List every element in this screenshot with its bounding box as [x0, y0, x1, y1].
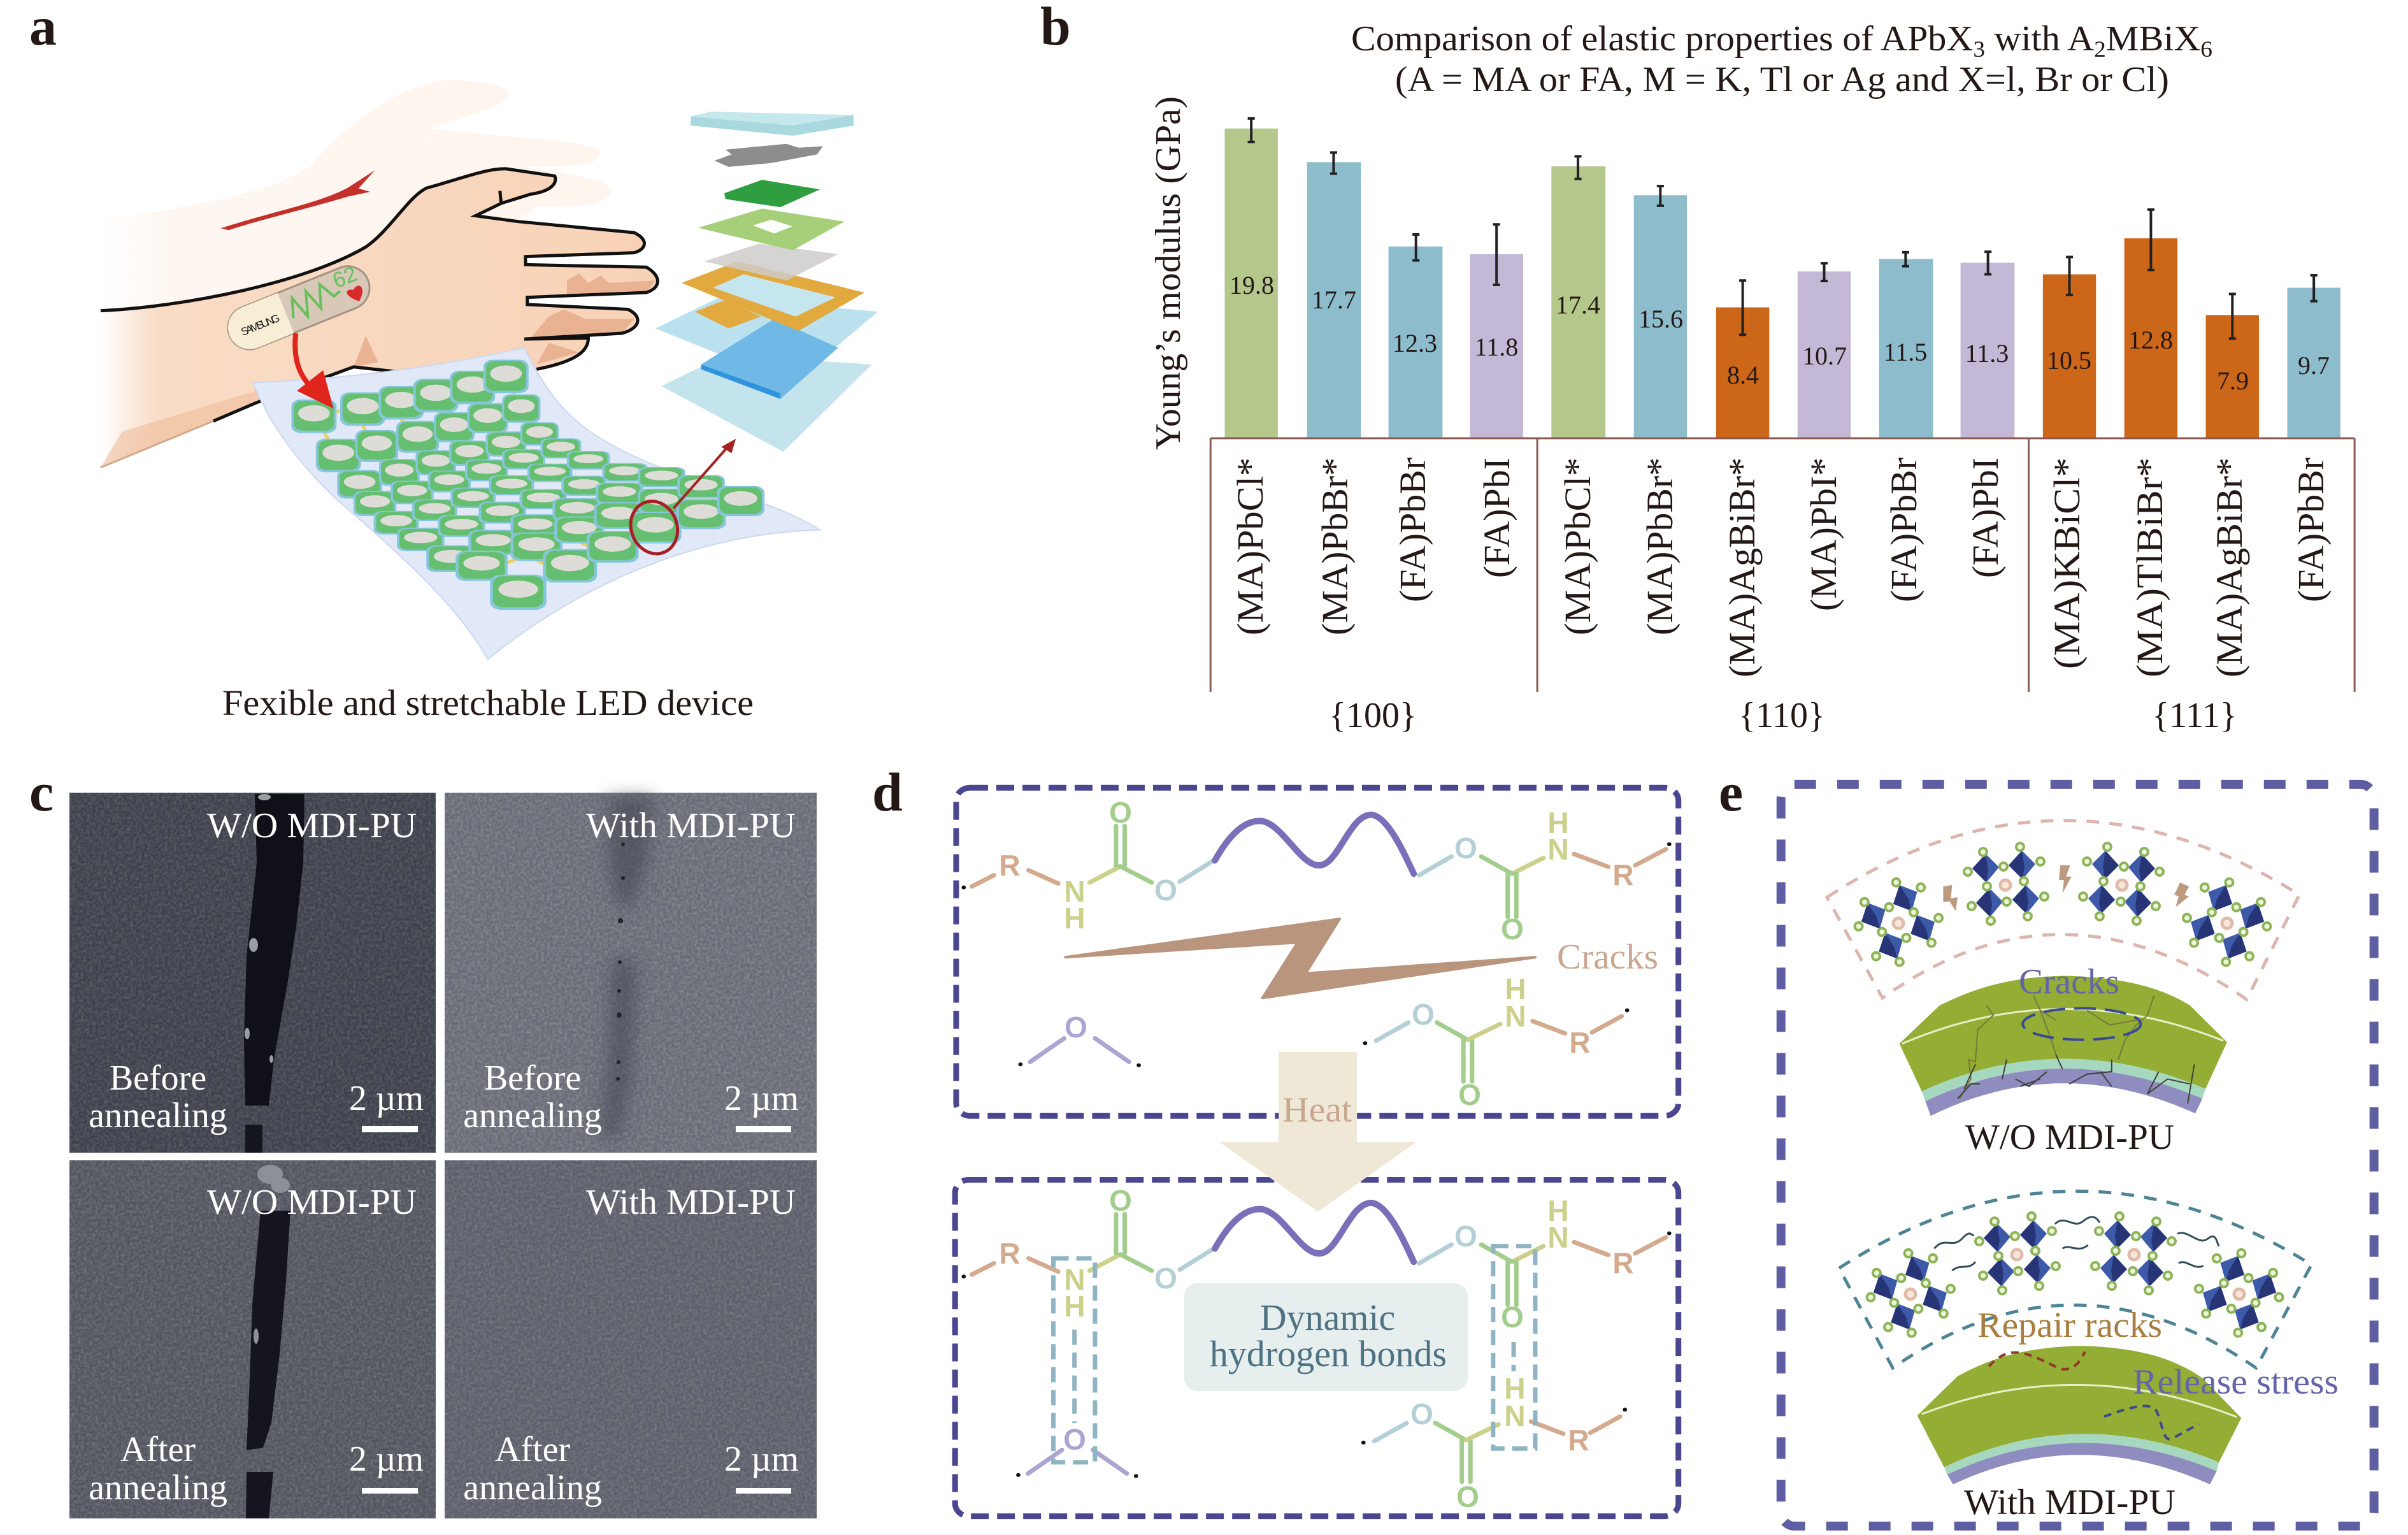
chart title: 6 — [2200, 36, 2212, 62]
dashed crack ellipse — [2023, 1008, 2140, 1040]
atom labels bottom: H — [1064, 1290, 1086, 1323]
category labels: (MA)PbI* — [1803, 458, 1844, 611]
repair crack trail — [1989, 1351, 2085, 1369]
panel label c: c — [29, 761, 54, 823]
illustration: sheet and layers — [253, 112, 878, 659]
category labels: (FA)PbI — [1476, 458, 1517, 578]
perovskite clusters: without MDI-PU — [1844, 843, 2282, 976]
category labels: (MA)AgBiBr* — [1721, 458, 1763, 677]
SEM image: With MDI-PU after annealing — [445, 1160, 817, 1518]
category labels: (MA)TlBiBr* — [2129, 458, 2170, 677]
bar values: 15.6 — [1638, 305, 1683, 333]
SEM image: With MDI-PU before annealing: With MDI-PU — [586, 806, 796, 846]
bar values: 10.7 — [1802, 342, 1847, 370]
crystal plane group labels: {111} — [2152, 696, 2237, 735]
SEM image: W/O MDI-PU after annealing: After — [120, 1430, 196, 1469]
icon: skin patch device — [221, 259, 376, 356]
SEM image: W/O MDI-PU after annealing: W/O MDI-PU — [207, 1183, 417, 1222]
bar values: 12.3 — [1393, 329, 1437, 357]
category labels: (MA)PbBr* — [1639, 458, 1681, 635]
chart title: Comparison of elastic properties of APbX — [1351, 19, 1951, 59]
perovskite clusters: with MDI-PU — [1856, 1213, 2294, 1347]
SEM image: With MDI-PU after annealing: 2 µm — [724, 1439, 799, 1479]
SEM image: W/O MDI-PU after annealing — [69, 1160, 436, 1518]
hydrogen bond highlight boxes — [1054, 1246, 1535, 1462]
bottom chain bonds — [972, 1203, 1666, 1482]
SEM image: W/O MDI-PU before annealing: 2 µm — [349, 1079, 424, 1118]
lightning crack — [1065, 919, 1535, 998]
top chain bonds — [972, 815, 1666, 1081]
chart title: 2 — [2094, 36, 2106, 62]
chart title: with A — [1985, 19, 2095, 59]
caption: W/O MDI-PU: W/O MDI-PU — [1965, 1118, 2174, 1157]
atom labels top: O — [1154, 874, 1177, 907]
category labels: (MA)PbCl* — [1557, 458, 1598, 635]
label: Repair racks: Repair racks — [1977, 1306, 2162, 1345]
dynamic hydrogen bonds callout box — [1184, 1283, 1468, 1391]
chart title: MBiX — [2106, 19, 2200, 59]
SEM image: With MDI-PU before annealing: Before — [484, 1058, 581, 1098]
atom labels top: O — [1454, 832, 1477, 865]
chart title — [1351, 19, 2212, 99]
category labels: (MA)AgBiBr* — [2209, 458, 2250, 677]
atom labels top: H — [1505, 972, 1526, 1005]
atom labels bottom: H — [1504, 1372, 1526, 1405]
heat arrow — [1219, 1052, 1416, 1212]
panel e: crack repair schematic — [1719, 761, 2374, 1526]
SEM image: W/O MDI-PU after annealing: annealing — [89, 1468, 227, 1508]
atom labels top: O — [1412, 998, 1435, 1031]
label: Release stress: Release stress — [2133, 1362, 2339, 1402]
atom labels top: O — [1064, 1011, 1087, 1044]
bars and error bars — [1210, 119, 2354, 692]
atom labels bottom: O — [1063, 1423, 1086, 1456]
atom labels bottom — [999, 1184, 1634, 1513]
bar values: 11.8 — [1475, 333, 1518, 361]
bar values: 10.5 — [2047, 346, 2091, 375]
SEM image: With MDI-PU after annealing: annealing — [463, 1468, 602, 1508]
film stack: with MDI-PU — [1917, 1346, 2241, 1485]
SEM image: W/O MDI-PU before annealing: annealing — [89, 1096, 227, 1135]
atom labels bottom: N — [1504, 1399, 1526, 1432]
caption a: Fexible and stretchable LED device — [222, 683, 754, 723]
atom labels top: O — [1501, 912, 1524, 946]
dashed box: healed state — [955, 1179, 1679, 1517]
atom labels top: N — [1547, 833, 1569, 866]
SEM image: With MDI-PU before annealing — [445, 793, 817, 1153]
SEM image: W/O MDI-PU before annealing: Before — [110, 1058, 206, 1098]
category labels: (MA)KBiCl* — [2046, 458, 2088, 669]
dashed wedge: without MDI-PU — [1827, 821, 2299, 1000]
film stack: without MDI-PU — [1900, 976, 2227, 1116]
LED connector grid — [314, 377, 741, 590]
label: Cracks: Cracks — [2019, 962, 2119, 1002]
panel label d: d — [872, 761, 903, 823]
dashed outer frame — [1781, 784, 2374, 1526]
patch brand: SAMSUNG — [240, 312, 282, 338]
SEM image: W/O MDI-PU after annealing: 2 µm — [349, 1439, 424, 1479]
chart title: (A = MA or FA, M = K, Tl or Ag and X=l, Br or Cl) — [1395, 60, 2169, 99]
SEM image: With MDI-PU after annealing: With MDI-PU — [586, 1183, 796, 1222]
atom labels top: N — [1505, 1000, 1526, 1033]
SEM image: W/O MDI-PU before annealing: W/O MDI-PU — [207, 806, 417, 846]
bar values: 17.4 — [1556, 291, 1600, 319]
atom labels bottom: H — [1547, 1194, 1569, 1227]
patch readout 62: 62 — [329, 262, 361, 293]
SEM image: With MDI-PU before annealing: annealing — [463, 1096, 602, 1135]
atom labels bottom: N — [1064, 1263, 1086, 1296]
dashed box: cracked state — [956, 788, 1679, 1116]
bar values: 11.5 — [1884, 338, 1927, 366]
atom labels top: H — [1064, 902, 1086, 935]
atom labels bottom: O — [1456, 1480, 1479, 1513]
bar values: 17.7 — [1312, 285, 1356, 314]
arrow to layer stack — [673, 439, 736, 508]
bar values — [1229, 271, 2330, 395]
LED array — [291, 359, 764, 610]
atom labels top: R — [1569, 1026, 1591, 1059]
panel d: hydrogen bond mechanism — [872, 761, 1679, 1517]
atom labels bottom: O — [1501, 1301, 1524, 1334]
SEM image: W/O MDI-PU before annealing — [69, 793, 436, 1153]
label: Heat: Heat — [1282, 1090, 1352, 1130]
dashed wedge: with MDI-PU — [1839, 1191, 2311, 1368]
atom labels bottom: O — [1454, 1220, 1477, 1253]
SEM image: With MDI-PU before annealing: 2 µm — [724, 1079, 799, 1118]
schematic shapes — [1781, 784, 2374, 1526]
atom labels bottom: N — [1547, 1221, 1569, 1254]
small lightning bolts — [1943, 865, 2189, 911]
category frame — [1210, 438, 2354, 692]
atom labels bottom: R — [1612, 1246, 1634, 1279]
stress release trail — [2104, 1406, 2199, 1439]
category labels — [1229, 458, 2332, 677]
radical dots — [961, 842, 1672, 1478]
atom labels top: O — [1109, 796, 1132, 829]
crystal plane group labels: {100} — [1329, 696, 1417, 735]
icon: flexible sheet — [253, 348, 820, 659]
atom labels bottom: R — [999, 1237, 1021, 1270]
polymer chains — [1934, 1217, 2219, 1271]
callout text: Dynamic — [1260, 1297, 1395, 1338]
icon: red circle highlight — [627, 499, 682, 556]
icon: red arrow to sheet — [295, 333, 333, 408]
atom labels top: H — [1547, 806, 1569, 839]
chart title: 3 — [1973, 36, 1985, 62]
icon: ghost hand — [101, 80, 612, 312]
category labels: (MA)PbCl* — [1229, 458, 1271, 635]
panel c: SEM images — [29, 761, 817, 1518]
icon: blood vessel — [220, 170, 375, 230]
callout text: hydrogen bonds — [1210, 1333, 1447, 1374]
panel b: elastic properties bar chart — [1040, 0, 2354, 735]
panel a: flexible LED device — [29, 0, 878, 723]
atom labels top — [999, 796, 1634, 1111]
bar values: 9.7 — [2298, 351, 2330, 380]
molecule bonds and boxes — [955, 788, 1679, 1517]
illustration: hands — [101, 80, 657, 468]
callout text — [1210, 1297, 1447, 1374]
crystal plane group labels — [1329, 696, 2237, 735]
atom labels top: R — [1612, 858, 1634, 891]
icon: outlined hand — [101, 169, 657, 468]
bar values: 12.8 — [2128, 326, 2173, 354]
atom labels bottom: R — [1568, 1423, 1589, 1457]
SEM image: With MDI-PU after annealing: After — [495, 1430, 570, 1469]
atom labels top: R — [999, 849, 1021, 882]
category labels: (FA)PbBr — [1392, 458, 1433, 602]
panel label e: e — [1719, 761, 1743, 823]
caption: With MDI-PU: With MDI-PU — [1964, 1483, 2175, 1522]
atom labels bottom: O — [1154, 1262, 1177, 1295]
bar values: 7.9 — [2217, 366, 2249, 395]
atom labels top: O — [1458, 1078, 1481, 1111]
bar values: 8.4 — [1727, 361, 1759, 389]
category labels: (FA)PbBr — [2290, 458, 2332, 602]
atom labels bottom: O — [1109, 1184, 1132, 1217]
category labels: (MA)PbBr* — [1314, 458, 1356, 635]
crystal plane group labels: {110} — [1738, 696, 1825, 735]
category labels: (FA)PbBr — [1883, 458, 1924, 602]
label: Cracks: Cracks — [1557, 937, 1658, 977]
category labels: (FA)PbI — [1965, 458, 2006, 578]
atom labels top: N — [1064, 875, 1086, 908]
bar values: 19.8 — [1229, 271, 1274, 299]
bar values: 11.3 — [1965, 339, 2009, 368]
y axis title: Young’s modulus (GPa) — [1149, 96, 1188, 450]
layer stack exploded view — [656, 112, 878, 452]
atom labels bottom: O — [1410, 1397, 1433, 1431]
